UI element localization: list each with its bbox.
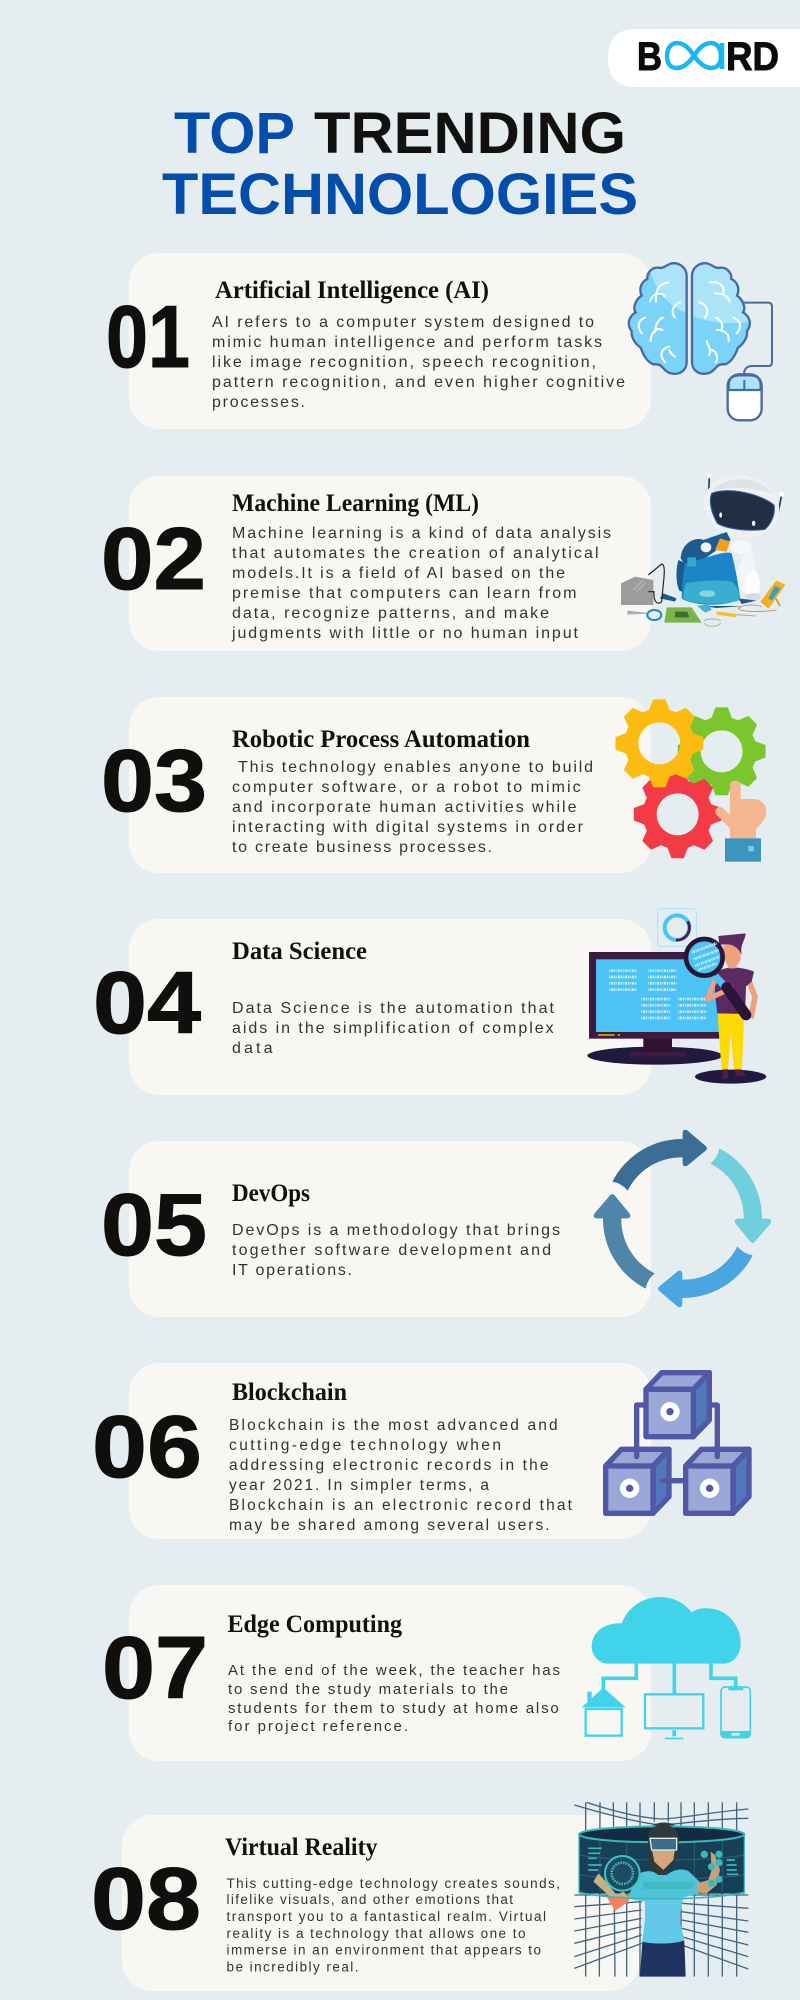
body text <box>212 314 625 411</box>
body text: Blockchain is the most advanced and <box>229 1417 558 1434</box>
card background <box>129 476 651 651</box>
body text: models.It is a field of AI based on the <box>232 565 565 582</box>
body text: IT operations. <box>232 1262 352 1279</box>
body text: immerse in an environment that appears to <box>226 1942 541 1958</box>
card background <box>129 1363 651 1539</box>
logo: Board: RD <box>726 35 779 79</box>
title <box>162 101 638 227</box>
panel: 08 Virtual Reality <box>91 1802 748 1991</box>
body text: AI refers to a computer system designed to <box>212 314 594 331</box>
icon: person in virtual reality <box>574 1802 748 1977</box>
panel: 03 Robotic Process Automation <box>101 697 766 873</box>
title: TRENDING <box>314 101 626 166</box>
body text: reality is a technology that allows one to <box>226 1926 526 1941</box>
body text: Data Science is the automation that <box>232 1000 555 1017</box>
card background <box>122 1815 640 1991</box>
body text: interacting with digital systems in order <box>232 819 584 836</box>
body text: judgments with little or no human input <box>231 625 579 642</box>
body text: This cutting-edge technology creates sounds, <box>226 1876 560 1891</box>
body text: data <box>232 1040 273 1057</box>
icon: robot with backpack and tools <box>621 467 786 626</box>
heading: Data Science <box>232 938 367 965</box>
body text <box>229 1417 573 1534</box>
panel: 01 Artificial Intelligence <box>106 253 772 429</box>
body text <box>232 1222 560 1279</box>
body text: mimic human intelligence and perform tasks <box>212 334 602 351</box>
icon: monitor and analyst with magnifier <box>587 909 766 1084</box>
body text: Machine learning is a kind of data analysis <box>232 525 611 542</box>
number 04: 04 <box>93 953 201 1052</box>
panel: 06 Blockchain <box>92 1363 749 1539</box>
body text: processes. <box>212 394 305 411</box>
title: TECHNOLOGIES <box>162 162 638 227</box>
body text: computer software, or a robot to mimic <box>232 779 581 796</box>
heading: Virtual Reality <box>225 1834 378 1861</box>
body text: Blockchain is an electronic record that <box>229 1497 573 1514</box>
card background <box>129 919 651 1095</box>
body text: year 2021. In simpler terms, a <box>229 1477 489 1494</box>
card background <box>129 1141 651 1317</box>
number 08: 08 <box>91 1849 201 1948</box>
body text <box>232 759 593 856</box>
body text <box>232 1000 555 1057</box>
body text: be incredibly real. <box>226 1960 358 1974</box>
icon: gears with pointing hand <box>615 699 766 862</box>
heading: Machine Learning (ML) <box>232 490 479 517</box>
number 03: 03 <box>101 731 207 830</box>
icon: connected blocks <box>606 1373 749 1513</box>
panel: 07 Edge Computing <box>102 1585 750 1761</box>
body text: students for them to study at home also <box>228 1700 559 1717</box>
number 07: 07 <box>102 1618 208 1717</box>
logo: Board: B <box>637 35 662 79</box>
icon: cloud with devices <box>582 1597 750 1739</box>
body text: premise that computers can learn from <box>232 585 576 602</box>
title: TOP <box>174 101 295 166</box>
panel: 04 Data Science <box>93 909 766 1095</box>
body text: to create business processes. <box>232 839 492 856</box>
card background <box>129 253 651 429</box>
icon: circular arrows <box>594 1130 771 1307</box>
body text: addressing electronic records in the <box>229 1457 548 1474</box>
card background <box>129 1585 651 1761</box>
body text: together software development and <box>232 1242 551 1259</box>
body text <box>228 1662 560 1735</box>
body text: that automates the creation of analytical <box>232 545 598 562</box>
body text: to send the study materials to the <box>228 1681 508 1698</box>
body text: cutting-edge technology when <box>229 1437 501 1454</box>
body text <box>226 1876 560 1974</box>
body text: lifelike visuals, and other emotions that <box>226 1892 513 1907</box>
body text: DevOps is a methodology that brings <box>232 1222 560 1239</box>
body text: data, recognize patterns, and make <box>232 605 549 622</box>
heading: Artificial Intelligence (AI) <box>215 277 489 304</box>
logo: Board <box>608 29 800 87</box>
heading: DevOps <box>232 1180 310 1207</box>
heading: Robotic Process Automation <box>232 726 530 753</box>
number 02: 02 <box>101 509 206 608</box>
icon: brain with mouse <box>629 263 772 420</box>
body text: aids in the simplification of complex <box>232 1020 554 1037</box>
body text: This technology enables anyone to build <box>238 759 593 776</box>
panel: 02 Machine Learning <box>101 467 786 651</box>
number 06: 06 <box>92 1397 202 1496</box>
number 01: 01 <box>106 287 190 386</box>
heading: Edge Computing <box>228 1611 402 1638</box>
body text: At the end of the week, the teacher has <box>228 1662 560 1679</box>
body text: like image recognition, speech recognition, <box>212 354 596 371</box>
body text: and incorporate human activities while <box>232 799 577 816</box>
body text: for project reference. <box>228 1718 408 1735</box>
heading: Blockchain <box>232 1379 347 1406</box>
number 05: 05 <box>101 1175 207 1274</box>
body text: pattern recognition, and even higher cognitive <box>212 374 625 391</box>
body text: may be shared among several users. <box>229 1517 550 1534</box>
body text <box>231 525 611 642</box>
card background <box>129 697 651 873</box>
panel: 05 DevOps <box>101 1130 771 1317</box>
body text: transport you to a fantastical realm. Virtual <box>226 1909 546 1924</box>
